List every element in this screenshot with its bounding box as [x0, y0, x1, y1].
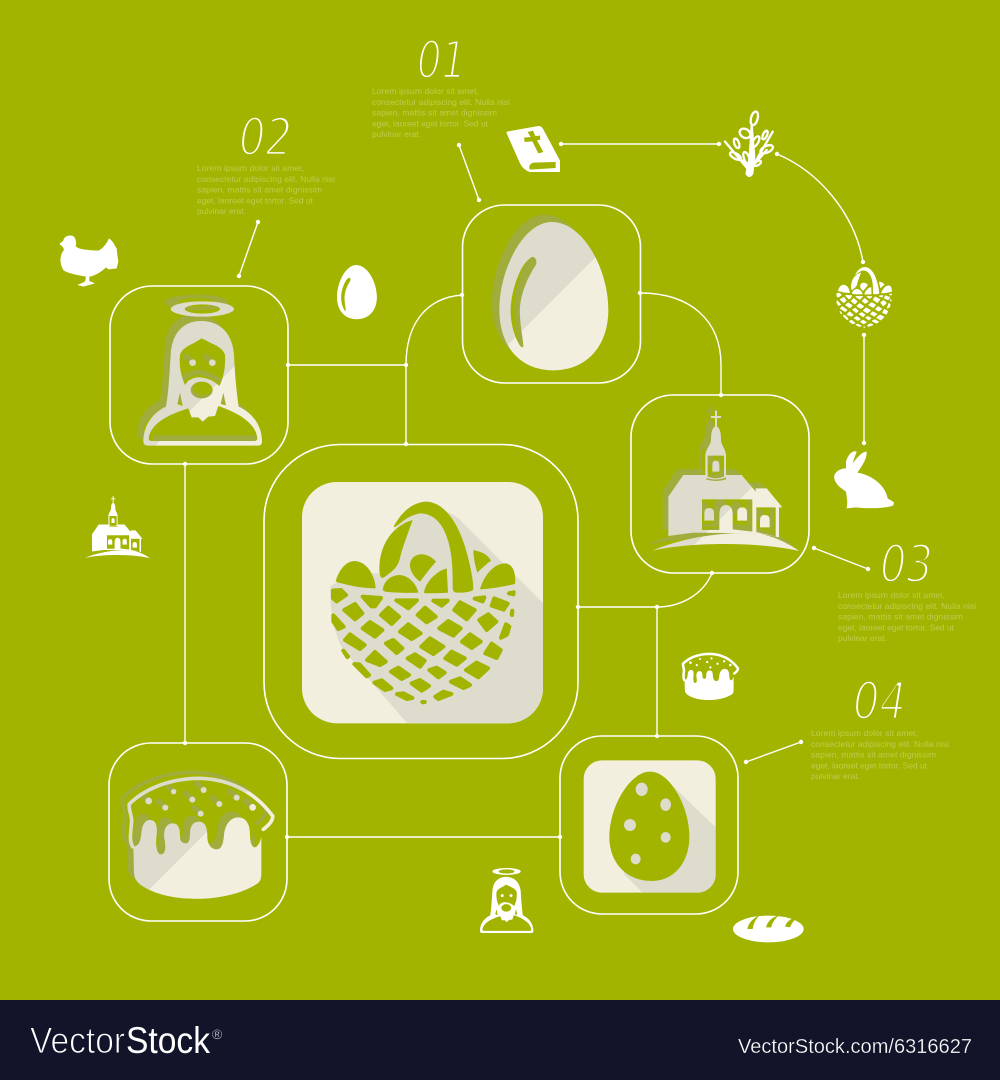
- footer image id: VectorStock.com/6316627: [738, 1035, 972, 1058]
- text block 04: pulvinar erat.: [811, 771, 860, 781]
- icon: dotted egg tile: [584, 760, 716, 893]
- text block 01: Lorem ipsum dolor sit amet,: [372, 86, 479, 96]
- icon: small egg: [337, 265, 377, 319]
- text block 02: [197, 163, 335, 216]
- icon: rabbit: [834, 451, 894, 508]
- text block 04: sapien, mattis sit amet dignissim: [811, 750, 936, 760]
- icon: hen: [59, 235, 118, 287]
- icon: small basket: [837, 267, 892, 327]
- text block 02: pulvinar erat.: [197, 206, 246, 216]
- text block 03: consectetur adipiscing elit. Nulla nisi: [838, 601, 976, 611]
- text block 03: Lorem ipsum dolor sit amet,: [838, 590, 945, 600]
- text block 01: eget, laoreet eget tortor. Sed ut: [372, 118, 489, 128]
- text block 03: [838, 590, 976, 643]
- text block 03: eget, laoreet eget tortor. Sed ut: [838, 622, 955, 632]
- footer logo: Stock: [126, 1020, 210, 1061]
- icon: small cake: [683, 654, 738, 700]
- icon: church on hill: [647, 405, 799, 551]
- panel: church: [631, 395, 809, 573]
- text block 04: eget, laoreet eget tortor. Sed ut: [811, 760, 928, 770]
- text block 01: pulvinar erat.: [372, 129, 421, 139]
- icon: bread: [733, 915, 804, 942]
- icon: willow branch: [725, 111, 774, 177]
- icon: cake: [122, 772, 273, 899]
- text block 04: [811, 728, 949, 781]
- icon: Jesus with halo: [137, 295, 262, 446]
- text block 04: Lorem ipsum dolor sit amet,: [811, 728, 918, 738]
- panel: Easter cake: [109, 743, 287, 921]
- icon: small Jesus: [480, 868, 533, 933]
- text block 01: consectetur adipiscing elit. Nulla nisi: [372, 97, 510, 107]
- heading: 02: 02: [239, 108, 292, 168]
- footer logo: [30, 1020, 223, 1061]
- heading: 04: 04: [853, 672, 906, 732]
- footer bar: [0, 1000, 1000, 1080]
- text block 02: consectetur adipiscing elit. Nulla nisi: [197, 174, 335, 184]
- text block 03: sapien, mattis sit amet dignissim: [838, 612, 963, 622]
- footer logo: Vector: [30, 1020, 125, 1061]
- footer logo: ®: [212, 1026, 223, 1042]
- text block 01: [372, 86, 510, 139]
- panel: egg: [462, 205, 640, 383]
- heading: 01: 01: [417, 31, 466, 91]
- panel: central basket: [264, 444, 578, 758]
- heading: 03: 03: [880, 535, 933, 595]
- text block 02: eget, laoreet eget tortor. Sed ut: [197, 196, 314, 206]
- text block 01: sapien, mattis sit amet dignissim: [372, 108, 497, 118]
- icon: small church: [85, 496, 150, 558]
- text block 02: sapien, mattis sit amet dignissim: [197, 184, 322, 194]
- text block 04: consectetur adipiscing elit. Nulla nisi: [811, 739, 949, 749]
- panel: dotted egg: [560, 736, 738, 914]
- panel: Jesus: [110, 286, 288, 464]
- icon: basket with flat shadow: [302, 482, 560, 723]
- icon: egg: [492, 215, 608, 370]
- connector lines: [183, 142, 870, 839]
- text block 03: pulvinar erat.: [838, 633, 887, 643]
- text block 02: Lorem ipsum dolor sit amet,: [197, 163, 304, 173]
- icon: bible: [507, 126, 560, 172]
